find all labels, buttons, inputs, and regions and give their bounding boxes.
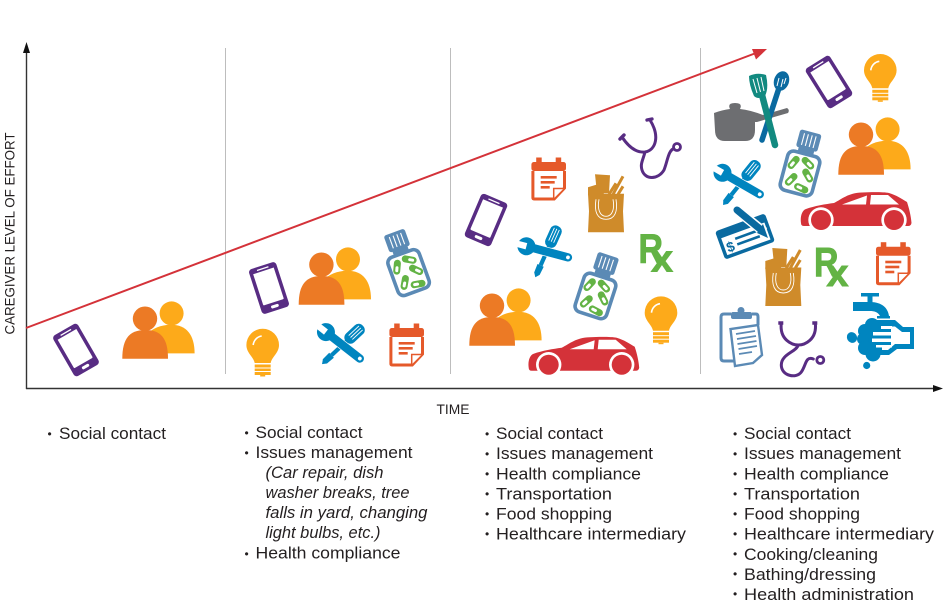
text block: stage 3 tasks: Health compliance xyxy=(496,466,641,484)
icon: phone xyxy=(248,261,290,315)
text block: stage 2 tasks: Social contact xyxy=(256,424,363,442)
icon: light bulb xyxy=(864,54,897,102)
text block: stage 3 tasks: Transportation xyxy=(496,486,612,504)
stage 1 icons xyxy=(52,301,195,378)
text block: stage 2 tasks: Health compliance xyxy=(256,544,400,562)
icon: tools xyxy=(313,319,369,368)
chart: caregiver effort over time xyxy=(2,42,943,417)
text block: stage 2 tasks xyxy=(244,424,428,562)
text block: stage 4 tasks: Issues management xyxy=(744,445,901,463)
x axis arrow xyxy=(26,385,943,392)
icon: prescription Rx: R xyxy=(638,225,663,271)
icon: stethoscope xyxy=(620,119,680,178)
text block: stage 4 tasks: Social contact xyxy=(744,425,851,443)
x axis label: TIME xyxy=(436,402,470,417)
icon: notepad xyxy=(531,158,566,199)
icon: light bulb xyxy=(246,329,279,376)
icon: grocery bag xyxy=(588,174,624,232)
text block: stage 3 tasks: Social contact xyxy=(496,425,603,443)
text block: stage 3 tasks: • xyxy=(485,447,489,461)
icon: phone xyxy=(804,54,854,110)
text block: stage 4 tasks: • xyxy=(733,447,737,461)
icon: check and pen xyxy=(715,210,775,260)
icon: phone xyxy=(52,322,100,378)
text block: stage 4 tasks: Health compliance xyxy=(744,466,889,484)
text block: stage 4 tasks xyxy=(733,425,935,604)
y axis label: CAREGIVER LEVEL OF EFFORT xyxy=(2,132,18,334)
text block: stage 4 tasks: • xyxy=(733,547,737,561)
icon: people xyxy=(122,301,195,359)
text block: stage 3 tasks: • xyxy=(485,487,489,501)
text block: stage 3 tasks: • xyxy=(485,507,489,521)
icon: people xyxy=(838,117,911,175)
text block: stage 4 tasks: • xyxy=(733,507,737,521)
text block: stage 4 tasks: • xyxy=(733,527,737,541)
icon: clipboard xyxy=(721,307,762,366)
icon: stethoscope xyxy=(778,323,824,376)
text block: stage 2 tasks: Issues management xyxy=(256,444,413,462)
icon: pot and utensils xyxy=(714,69,792,145)
text block: stage 2 tasks: • xyxy=(244,426,249,440)
stage 3 icons xyxy=(464,119,680,377)
y axis arrow xyxy=(23,42,30,389)
text block: stage 2 tasks: • xyxy=(244,446,249,460)
text block: stage 3 tasks: Healthcare intermediary xyxy=(496,526,687,544)
text block: stage 4 tasks: • xyxy=(733,467,737,481)
icon: notepad xyxy=(876,242,911,284)
text block: stage 4 tasks: Transportation xyxy=(744,486,860,504)
icon: tools xyxy=(707,154,770,211)
text block: stage 2 tasks: (Car repair, dish xyxy=(266,464,384,482)
icon: check and pen: $ xyxy=(724,238,737,255)
icon: car xyxy=(528,337,639,377)
icon: people xyxy=(469,288,542,346)
text block: stage 2 tasks: light bulbs, etc.) xyxy=(266,524,380,542)
icon: faucet and hand washing xyxy=(845,293,914,369)
text block: stage 3 tasks: • xyxy=(485,527,489,541)
text block: stage 4 tasks: Cooking/cleaning xyxy=(744,546,878,564)
icon: notepad xyxy=(389,324,424,365)
text block: stage 2 tasks: falls in yard, changing xyxy=(266,504,428,522)
icon: pill bottle xyxy=(378,227,431,297)
text block: stage 2 tasks: • xyxy=(244,547,249,561)
stage 2 icons xyxy=(246,227,431,376)
text block: stage 1 tasks: Social contact xyxy=(59,425,166,443)
text block: stage 4 tasks: • xyxy=(733,587,737,601)
icon: prescription Rx: x xyxy=(826,253,848,295)
text block: stage 4 tasks: Food shopping xyxy=(744,506,860,524)
text block: stage 3 tasks: • xyxy=(485,427,489,441)
stage 4 icons xyxy=(707,54,914,376)
text block: stage 2 tasks: washer breaks, tree xyxy=(266,484,410,502)
text block: stage 4 tasks: • xyxy=(733,427,737,441)
icon: tools xyxy=(509,217,580,285)
icon: light bulb xyxy=(645,296,677,344)
icon: prescription Rx: R xyxy=(814,239,838,285)
text block: stage 1 tasks: • xyxy=(48,427,52,441)
icon: phone xyxy=(464,193,508,247)
icon: prescription Rx: x xyxy=(651,239,673,281)
icon: car xyxy=(801,192,912,233)
text block: stage 4 tasks: • xyxy=(733,487,737,501)
text block: stage 4 tasks: Bathing/dressing xyxy=(744,566,876,584)
icon: grocery bag xyxy=(765,248,801,306)
text block: stage 3 tasks: • xyxy=(485,467,489,481)
vertical time-stage dividers xyxy=(226,48,700,374)
icon: pill bottle xyxy=(779,128,827,197)
red effort trend arrow xyxy=(26,49,767,328)
text block: stage 3 tasks: Issues management xyxy=(496,445,653,463)
icon: pill bottle xyxy=(574,250,624,320)
icon: people xyxy=(299,247,371,305)
text block: stage 4 tasks: Healthcare intermediary xyxy=(744,526,935,544)
text block: stage 4 tasks: • xyxy=(733,567,737,581)
text block: stage 3 tasks: Food shopping xyxy=(496,506,612,524)
text block: stage 3 tasks xyxy=(485,425,687,544)
text block: stage 4 tasks: Health administration xyxy=(744,586,914,604)
